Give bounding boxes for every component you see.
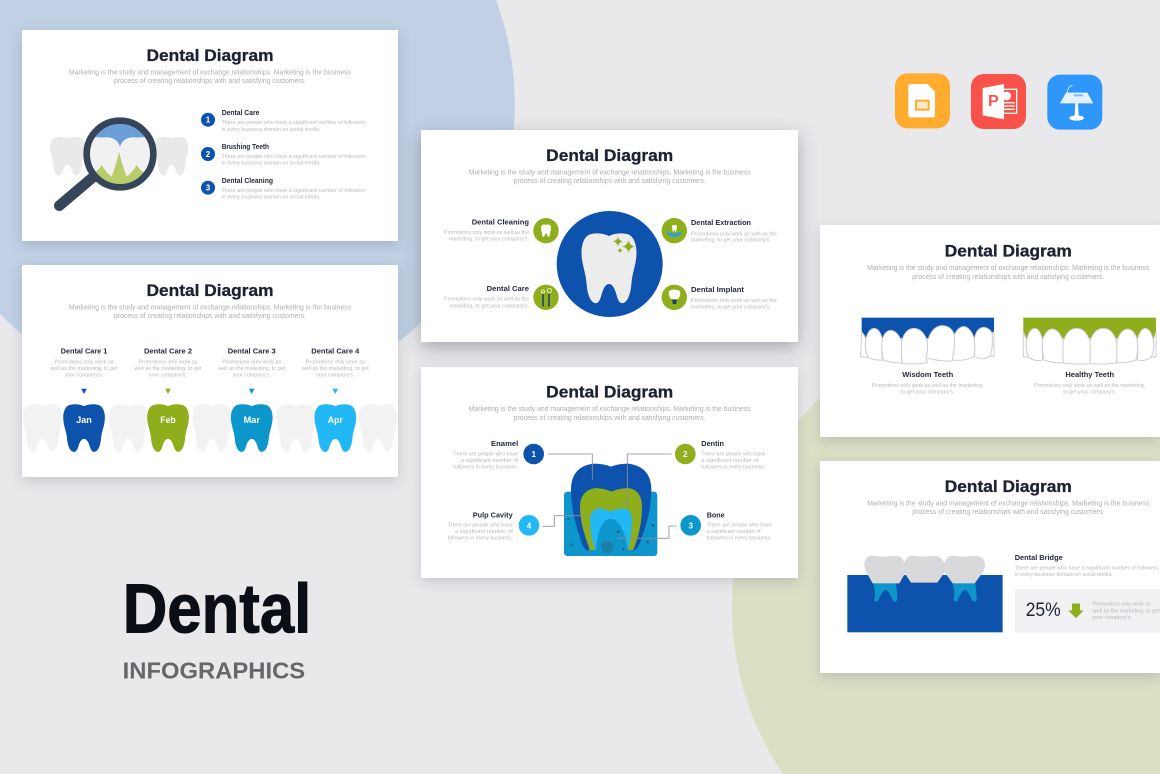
column: Apr: Apr [328,415,343,426]
subtitle: process of creating relationships with and satisfying customers. [514,413,706,422]
callout 4: Pulp Cavity: There are people who have [448,522,513,528]
column: Apr [301,346,369,452]
column: Feb: well as the marketing, to get [134,366,202,372]
list item 1: in every business domain on social media. [222,127,321,133]
panel: monthly dental care slide [22,265,398,477]
callout 4: Pulp Cavity [448,510,539,542]
list item 2: 2 [206,150,211,159]
column: Mar: well as the marketing, to get [217,366,286,372]
text: Dental Bridge: Dental Bridge [1015,553,1063,562]
brand title: Dental: Dental [123,570,311,648]
list item 2 [201,142,366,167]
caption: Healthy Teeth [1034,370,1146,395]
item: Dental Care [444,284,559,310]
panel: wisdom vs healthy teeth slide [820,225,1160,437]
item: Dental Cleaning: Promotions only work as well as the [444,230,530,236]
caption: Healthy Teeth: Promotions only work as well as the marketing, [1034,383,1146,389]
icon: PowerPoint [971,74,1026,129]
callout 1: Enamel: followers in every business. [453,464,519,470]
callout 2: Dentin: 2 [683,450,688,459]
list item 3: There are people who have a significant number of followers [222,188,366,194]
callout 2: Dentin: a significant number of [701,458,759,464]
callout 4: Pulp Cavity: followers in every business. [448,536,513,542]
column: Mar: Dental Care 3 [228,346,276,356]
item: Dental Extraction: marketing, to get your company's. [691,238,771,244]
item: Dental Extraction [662,218,777,244]
list item 2: in every business domain on social media. [222,161,321,167]
subtitle: process of creating relationships with and satisfying customers. [912,272,1104,281]
column: Feb [134,346,202,452]
list item 1: There are people who have a significant number of followers [222,120,366,126]
caption: Healthy Teeth: Healthy Teeth [1065,370,1114,379]
illustration: tooth in blue circle [557,211,663,317]
column: Jan [50,346,118,452]
heading: Dental Diagram [546,147,673,165]
column: Mar: Mar [243,415,260,426]
list item 1 [201,108,366,133]
caption: Wisdom Teeth: Wisdom Teeth [902,370,954,379]
subtitle: Marketing is the study and management of exchange relationships. Marketing is the business [469,168,751,176]
callout 3: Bone: followers in every business. [707,536,772,542]
callout 3: Bone: Bone [707,510,725,520]
column: Jan: Dental Care 1 [61,346,108,356]
subtitle: process of creating relationships with and satisfying customers. [912,507,1104,516]
callout 2: Dentin [675,439,766,470]
callout 1: Enamel [453,439,544,470]
subtitle: Marketing is the study and management of exchange relationships. Marketing is the business [69,302,351,312]
column: Jan: Jan [76,415,92,426]
column: Jan: your company's. [65,373,103,379]
stat box: 25% [1015,589,1160,633]
column: Apr: Dental Care 4 [311,346,360,356]
item: Dental Implant: Dental Implant [691,285,744,294]
panel: dental services slide [421,130,798,342]
stat box: 25%: 25% [1026,600,1061,621]
text: Dental Bridge [1015,553,1158,578]
item: Dental Extraction: Dental Extraction [691,218,751,227]
heading: Dental Diagram [945,242,1072,260]
list item 2: There are people who have a significant number of followers [222,154,366,160]
subtitle: Marketing is the study and management of exchange relationships. Marketing is the business [469,404,751,413]
callout 2: Dentin: There are people who have [701,452,766,458]
item: Dental Cleaning [444,218,559,243]
callout 1: Enamel: Enamel [491,439,518,448]
callout 4: Pulp Cavity: 4 [527,521,532,530]
grey teeth row [23,404,397,452]
list item 2: Brushing Teeth [222,142,269,151]
list item 3 [201,176,366,200]
callout 4: Pulp Cavity: Pulp Cavity [473,510,513,520]
background shape: green circle [732,312,1160,774]
illustration: wisdom teeth [861,318,994,364]
column: Apr: well as the marketing, to get [301,366,369,372]
panel: dental bridge slide [820,461,1160,673]
heading: Dental Diagram [146,47,274,65]
column: Mar [217,346,286,452]
callout 4: Pulp Cavity: a significant number of [455,529,513,535]
subtitle: process of creating relationships with and satisfying customers. [114,311,306,320]
subtitle: process of creating relationships with and satisfying customers. [514,176,706,185]
column: Feb: Feb [160,415,176,426]
callout 3: Bone: There are people who have [707,522,772,528]
icon: PowerPoint: P [988,93,999,110]
column: Apr: your company's. [316,373,355,379]
text: Dental Bridge: in every business domain on social media. [1015,572,1113,578]
column: Jan: Promotions only work as [54,360,114,366]
item: Dental Extraction: Promotions only work as well as the [691,231,777,237]
item: Dental Care: Promotions only work as well as the [444,297,530,303]
item: Dental Implant: Promotions only work as well as the [691,298,777,304]
item: Dental Care: marketing, to get your company's. [449,303,529,309]
column: Mar: your company's. [233,373,271,379]
callout 1: Enamel: 1 [531,450,536,459]
column: Apr: Promotions only work as [306,360,365,366]
list item 3: 3 [206,184,211,192]
list item 1: Dental Care [222,108,259,117]
callout 1: Enamel: a significant number of [461,458,519,464]
heading: Dental Diagram [546,384,673,402]
brand subtitle: INFOGRAPHICS: INFOGRAPHICS [123,657,305,683]
callout 3: Bone [680,510,772,542]
illustration: dental bridge [847,556,1003,632]
column: Feb: your company's. [149,373,187,379]
item: Dental Cleaning: Dental Cleaning [472,218,529,226]
callout 2: Dentin: followers in every business. [701,464,766,470]
caption: Wisdom Teeth [872,370,984,395]
illustration: magnifier over teeth [50,117,188,206]
panel: magnifier slide [22,30,398,241]
column: Feb: Dental Care 2 [144,346,192,356]
caption: Wisdom Teeth: to get your company's. [901,389,955,395]
caption: Wisdom Teeth: Promotions only work as well as the marketing, [872,383,984,389]
item: Dental Implant [662,285,777,310]
app icons [895,73,1102,130]
stat box: 25%: your company's. [1093,615,1132,621]
callout 3: Bone: a significant number of [707,529,761,535]
subtitle: Marketing is the study and management of exchange relationships. Marketing is the business [69,68,351,76]
list item 3: Dental Cleaning [222,176,273,185]
stat box: 25%: Promotions only work as [1093,602,1151,608]
column: Jan: well as the marketing, to get [50,366,118,372]
caption: Healthy Teeth: to get your company's. [1063,389,1117,395]
item: Dental Implant: marketing, to get your company's. [691,304,771,310]
subtitle: process of creating relationships with and satisfying customers. [114,76,306,85]
callout 1: Enamel: There are people who have [453,452,519,458]
icon: Google Slides [895,73,950,128]
icon: Keynote [1047,75,1102,130]
callout 3: Bone: 3 [688,521,693,530]
column: Mar: Promotions only work as [222,360,281,366]
panel: tooth anatomy slide [421,367,798,578]
background shape: blue circle [0,0,515,405]
list item 1: 1 [206,116,211,124]
illustration: healthy teeth [1023,318,1156,364]
list item 3: in every business domain on social media. [222,194,321,200]
item: Dental Cleaning: marketing, to get your company's. [449,237,529,243]
heading: Dental Diagram [945,478,1072,496]
heading: Dental Diagram [146,282,274,300]
callout 2: Dentin: Dentin [701,439,724,448]
illustration: tooth cross-section [543,454,677,556]
column: Feb: Promotions only work as [138,360,198,366]
item: Dental Care: Dental Care [487,284,529,293]
